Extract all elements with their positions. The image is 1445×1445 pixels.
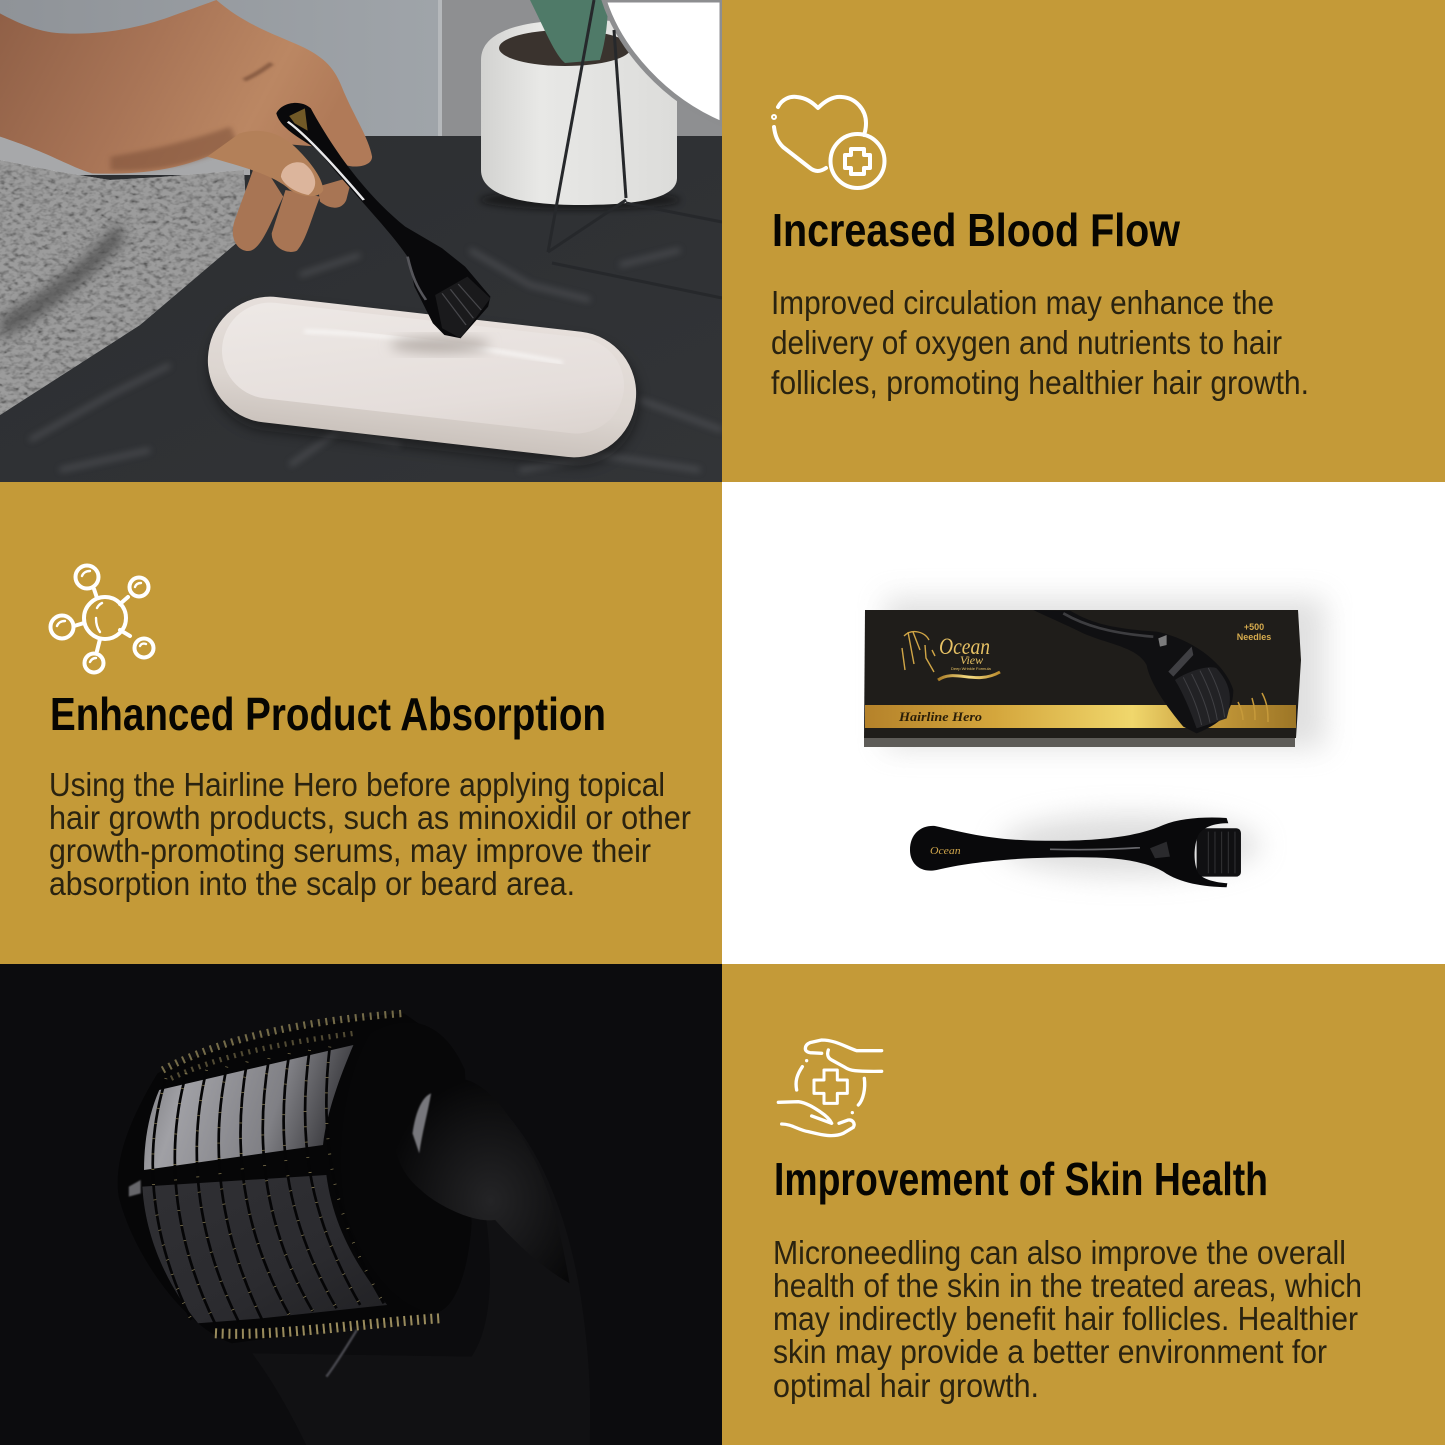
end cap: [341, 1022, 472, 1313]
roller in hand: [276, 103, 490, 338]
heart dot: [773, 116, 775, 118]
panel: close-up of roller on black: [0, 964, 722, 1445]
panel: increased blood flow: [722, 0, 1445, 482]
side light streak: [326, 1330, 357, 1377]
printed head shine: [1168, 647, 1193, 677]
pot soil: [499, 30, 631, 66]
roller close-up: [118, 1013, 590, 1445]
thumb nail: [281, 162, 315, 195]
panel: product box and roller on white: [722, 482, 1445, 964]
roller shadow on tray: [390, 337, 490, 353]
tray shadow: [203, 298, 645, 472]
printed drum ribs: [1183, 668, 1225, 725]
body text: hair growth products, such as minoxidil or other: [49, 799, 691, 836]
ring left arc: [796, 1067, 802, 1090]
body text: health of the skin in the treated areas, which: [773, 1267, 1362, 1304]
tray highlight: [304, 327, 563, 363]
wall tile seam: [438, 0, 442, 140]
body text: Using the Hairline Hero before applying topical: [49, 766, 665, 803]
pot body: [481, 20, 677, 205]
molecule satellites: [50, 566, 154, 672]
gold logo: [289, 108, 308, 131]
printed handle shine: [1063, 613, 1153, 637]
medical cross: [814, 1070, 847, 1103]
icon: heart with plus: [773, 97, 884, 188]
panel: improvement of skin health: [722, 964, 1445, 1445]
body text: [773, 1234, 1362, 1404]
box bottom edge: [864, 736, 1295, 747]
bright rib area: [144, 1045, 353, 1170]
head glint: [408, 257, 426, 300]
logo tagline: Deep Wrinkle Formula: [951, 666, 991, 671]
loose roller: [910, 818, 1241, 887]
panel background: [0, 964, 722, 1445]
roller body: [910, 818, 1228, 887]
lower rib area: [142, 1175, 387, 1323]
hair icons: [1238, 693, 1268, 722]
body text: Microneedling can also improve the overall: [773, 1234, 1346, 1271]
printed badge: [1158, 635, 1167, 647]
top hand: [805, 1040, 882, 1071]
body text: absorption into the scalp or beard area.: [49, 865, 575, 902]
tray basin: [217, 297, 629, 439]
roller needle drum: [1197, 828, 1241, 877]
icon: caring hands with cross: [778, 1040, 882, 1136]
body text: Improved circulation may enhance the: [771, 284, 1274, 321]
folded towel: [0, 160, 246, 415]
palm shadow: [111, 127, 239, 171]
thumb: [207, 131, 323, 196]
dark ribs: [153, 1047, 384, 1323]
molecule highlights: [57, 571, 146, 662]
heart lower edge: [774, 127, 826, 171]
white ceramic tray: [200, 290, 646, 472]
panel background: [0, 482, 722, 964]
heading: Increased Blood Flow: [772, 204, 1180, 256]
panel: photo of hand holding roller over tray: [0, 0, 722, 482]
logo word: view: View: [960, 653, 983, 667]
handle body: [252, 1073, 590, 1445]
plus sign: [845, 149, 870, 174]
drum ribs: [442, 284, 481, 325]
tile wall: [0, 0, 722, 140]
molecule core: [84, 597, 126, 639]
dark marble counter: [0, 136, 722, 482]
pot shadow: [480, 190, 680, 210]
body text: follicles, promoting healthier hair growth.: [771, 364, 1309, 401]
head dot detail: [1150, 842, 1170, 858]
bottom needle rows: [215, 1318, 440, 1334]
drum base: [118, 1013, 428, 1343]
towel shape: [0, 160, 246, 415]
handle highlight: [288, 122, 364, 200]
roller handle: [276, 103, 490, 338]
needle count: Needles: [1237, 632, 1271, 642]
body text: [49, 766, 691, 902]
logo wave: [938, 672, 1000, 680]
needle drum: [435, 277, 490, 338]
box front: [864, 610, 1301, 738]
plant leaf: [530, 0, 608, 63]
needle dots on ribs: [153, 1047, 384, 1323]
right wall tile: [442, 0, 722, 140]
ring right arc: [858, 1078, 865, 1105]
left sheen: [129, 1180, 141, 1197]
drum ribs: [1208, 832, 1235, 873]
heading: Improvement of Skin Health: [774, 1153, 1268, 1205]
body text: may indirectly benefit hair follicles. Healthier: [773, 1300, 1358, 1337]
box shadow: [885, 598, 1325, 748]
towel fold shadow: [0, 222, 125, 340]
wall left of towel: [0, 135, 250, 175]
knob glint: [413, 1093, 431, 1153]
body text: [771, 284, 1309, 401]
body text: skin may provide a better environment for: [773, 1333, 1327, 1370]
panel: enhanced product absorption: [0, 482, 722, 964]
body text: growth-promoting serums, may improve their: [49, 832, 651, 869]
box label: hairline hero: Hairline Hero: [898, 710, 982, 724]
icon: molecule: [50, 566, 154, 672]
printed handle and head: [1033, 610, 1233, 733]
heading: Enhanced Product Absorption: [50, 688, 606, 740]
panel background: [722, 0, 1445, 482]
ring dots: [807, 1061, 852, 1113]
finger crease shadow: [244, 63, 272, 80]
white mirror: [604, 0, 722, 124]
top needle rows: [163, 1013, 404, 1078]
plus circle: [830, 134, 884, 188]
heart outline: [778, 97, 866, 135]
lower fingers: [233, 157, 352, 252]
metal mirror stand: [548, 0, 722, 298]
logo on roller: Ocean: [930, 846, 961, 857]
body shine: [1050, 848, 1140, 850]
tray outer: [201, 290, 643, 464]
hand and fingers: [0, 0, 490, 338]
handle knob: [394, 1077, 570, 1283]
logo portrait: [902, 632, 935, 672]
panel background: [722, 482, 1445, 964]
bottom hand: [778, 1102, 854, 1136]
marble veining: [30, 250, 722, 470]
product box: [864, 610, 1301, 747]
gold band: [865, 705, 1296, 728]
body text: optimal hair growth.: [773, 1367, 1039, 1404]
plant pot: [480, 0, 680, 210]
brand logo: [902, 632, 1000, 680]
roller shadow: [1000, 815, 1260, 875]
needle count: [1237, 622, 1271, 642]
body text: delivery of oxygen and nutrients to hair: [771, 324, 1282, 361]
needle count: +500: [1244, 622, 1264, 632]
logo word: ocean: Ocean: [939, 634, 990, 659]
printed needle drum: [1175, 667, 1230, 728]
molecule bonds: [74, 589, 130, 651]
roller printed on box: [1033, 610, 1233, 733]
back of hand: [0, 0, 372, 174]
panel background: [722, 964, 1445, 1445]
